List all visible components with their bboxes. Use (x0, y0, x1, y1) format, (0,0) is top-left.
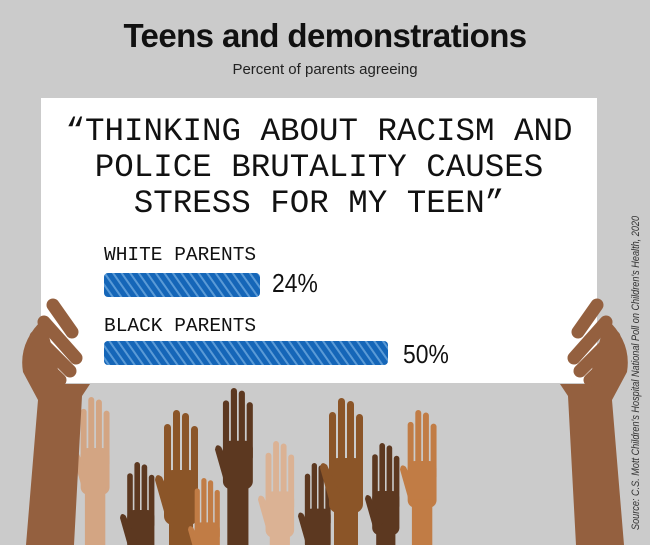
quote (65, 113, 573, 222)
label white parents: WHITE PARENTS (104, 244, 256, 266)
sign board (41, 98, 597, 383)
quote: “THINKING ABOUT RACISM AND (65, 113, 573, 150)
source: Source: C.S. Mott Children's Hospital National Poll on Children's Health, 2020 (630, 216, 642, 530)
subtitle: Percent of parents agreeing (232, 61, 418, 78)
title: Teens and demonstrations (123, 17, 527, 54)
quote: STRESS FOR MY TEEN” (134, 185, 504, 222)
value 50%: 50% (403, 339, 449, 369)
right holding hand (560, 305, 628, 545)
bar: white parents (104, 273, 260, 297)
quote: POLICE BRUTALITY CAUSES (95, 149, 543, 186)
raised hands (73, 388, 437, 545)
value 24%: 24% (272, 268, 318, 298)
bar: black parents (104, 341, 388, 365)
left holding hand (22, 305, 90, 545)
label black parents: BLACK PARENTS (104, 315, 256, 337)
